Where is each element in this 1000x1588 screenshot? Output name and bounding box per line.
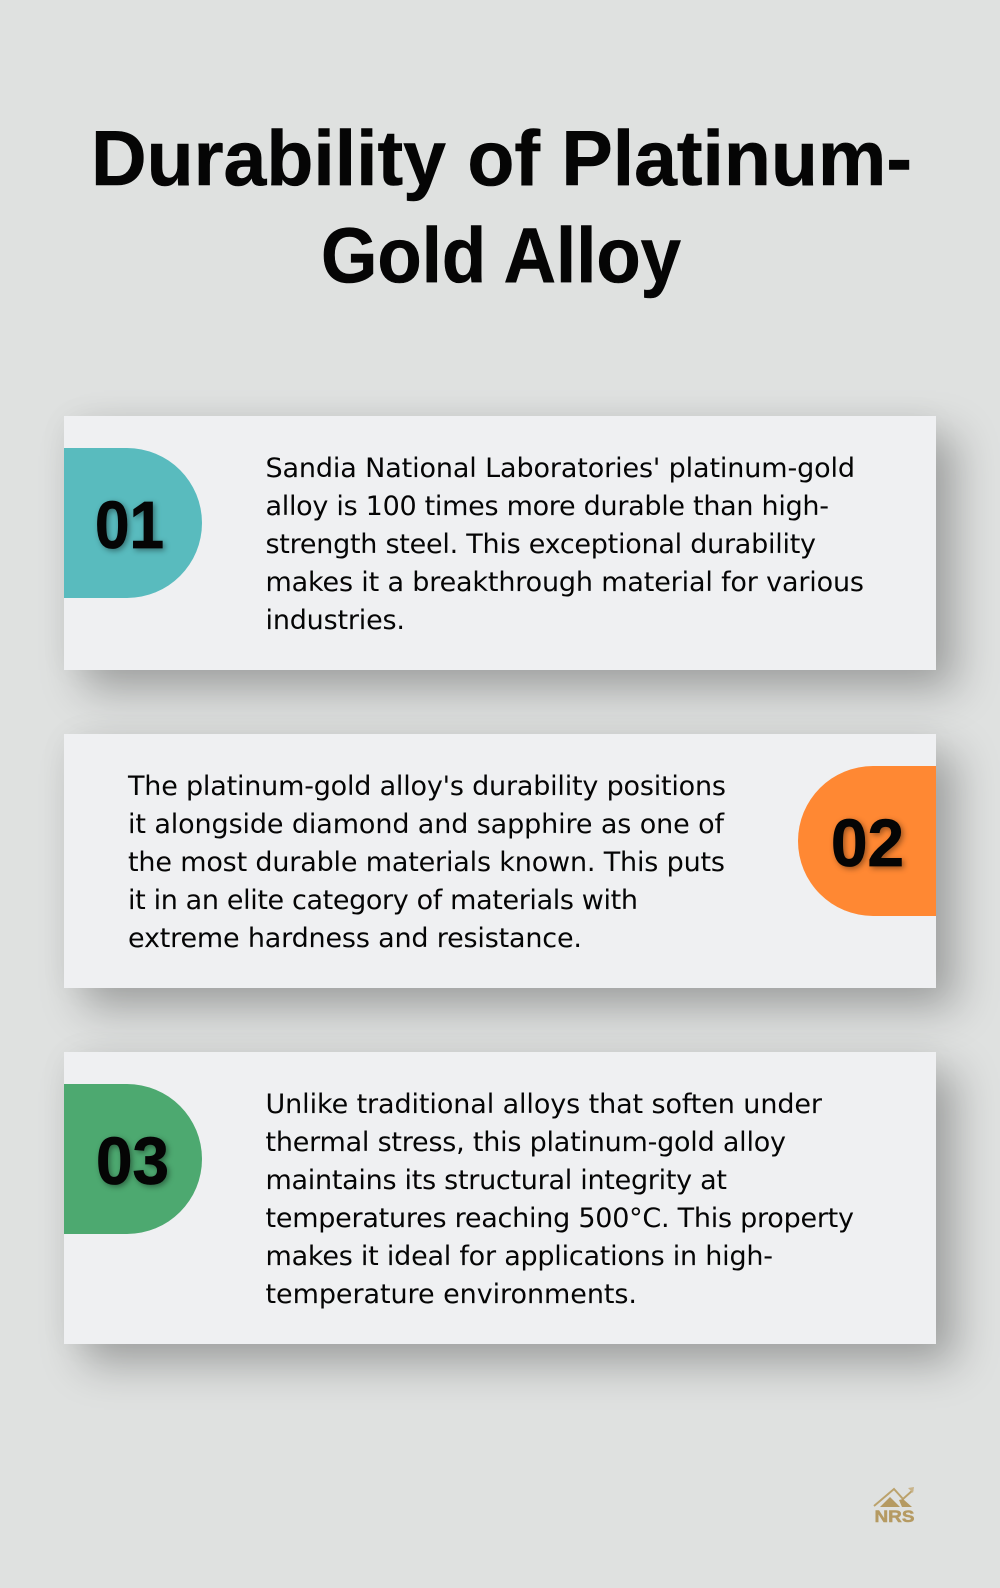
text block: point 02: The platinum-gold alloy's durability positions [127, 771, 726, 802]
text block: point 01: strength steel. This exceptional durability [266, 529, 816, 560]
panel: point 01 [64, 416, 936, 670]
title: Durability of Platinum- [91, 114, 912, 202]
text block: point 02: the most durable materials known. This puts [128, 847, 725, 878]
text block: point 03 [266, 1089, 854, 1310]
number: 02: 02 [831, 806, 904, 881]
number: 01: 01 [95, 488, 164, 563]
text block: point 03: temperature environments. [266, 1279, 637, 1310]
icon: NRS logo: NRS [874, 1507, 914, 1526]
text block: point 01: makes it a breakthrough material for various [266, 567, 864, 598]
text block: point 01 [266, 453, 864, 636]
text block: point 02: it alongside diamond and sapphire as one of [128, 809, 725, 840]
text block: point 03: makes it ideal for applications in high- [266, 1241, 773, 1272]
text block: point 01: alloy is 100 times more durable than high- [266, 491, 829, 522]
text block: point 01: Sandia National Laboratories' platinum-gold [266, 453, 855, 484]
text block: point 01: industries. [266, 605, 405, 636]
title: Gold Alloy [321, 211, 681, 299]
text block: point 02 [127, 771, 726, 954]
text block: point 03: maintains its structural integrity at [266, 1165, 727, 1196]
text block: point 02: extreme hardness and resistance. [128, 923, 582, 954]
badge: 03 [64, 1084, 202, 1234]
number: 03: 03 [96, 1124, 169, 1199]
text block: point 03: Unlike traditional alloys that soften under [266, 1089, 823, 1120]
text block: point 03: temperatures reaching 500°C. This property [266, 1203, 854, 1234]
badge: 01 [64, 448, 202, 598]
panel: point 02 [64, 734, 936, 988]
badge: 02 [798, 766, 936, 916]
text block: point 03: thermal stress, this platinum-gold alloy [266, 1127, 786, 1158]
title [91, 114, 912, 299]
icon: NRS logo [873, 1487, 914, 1526]
panel: point 03 [64, 1052, 936, 1344]
text block: point 02: it in an elite category of materials with [128, 885, 638, 916]
